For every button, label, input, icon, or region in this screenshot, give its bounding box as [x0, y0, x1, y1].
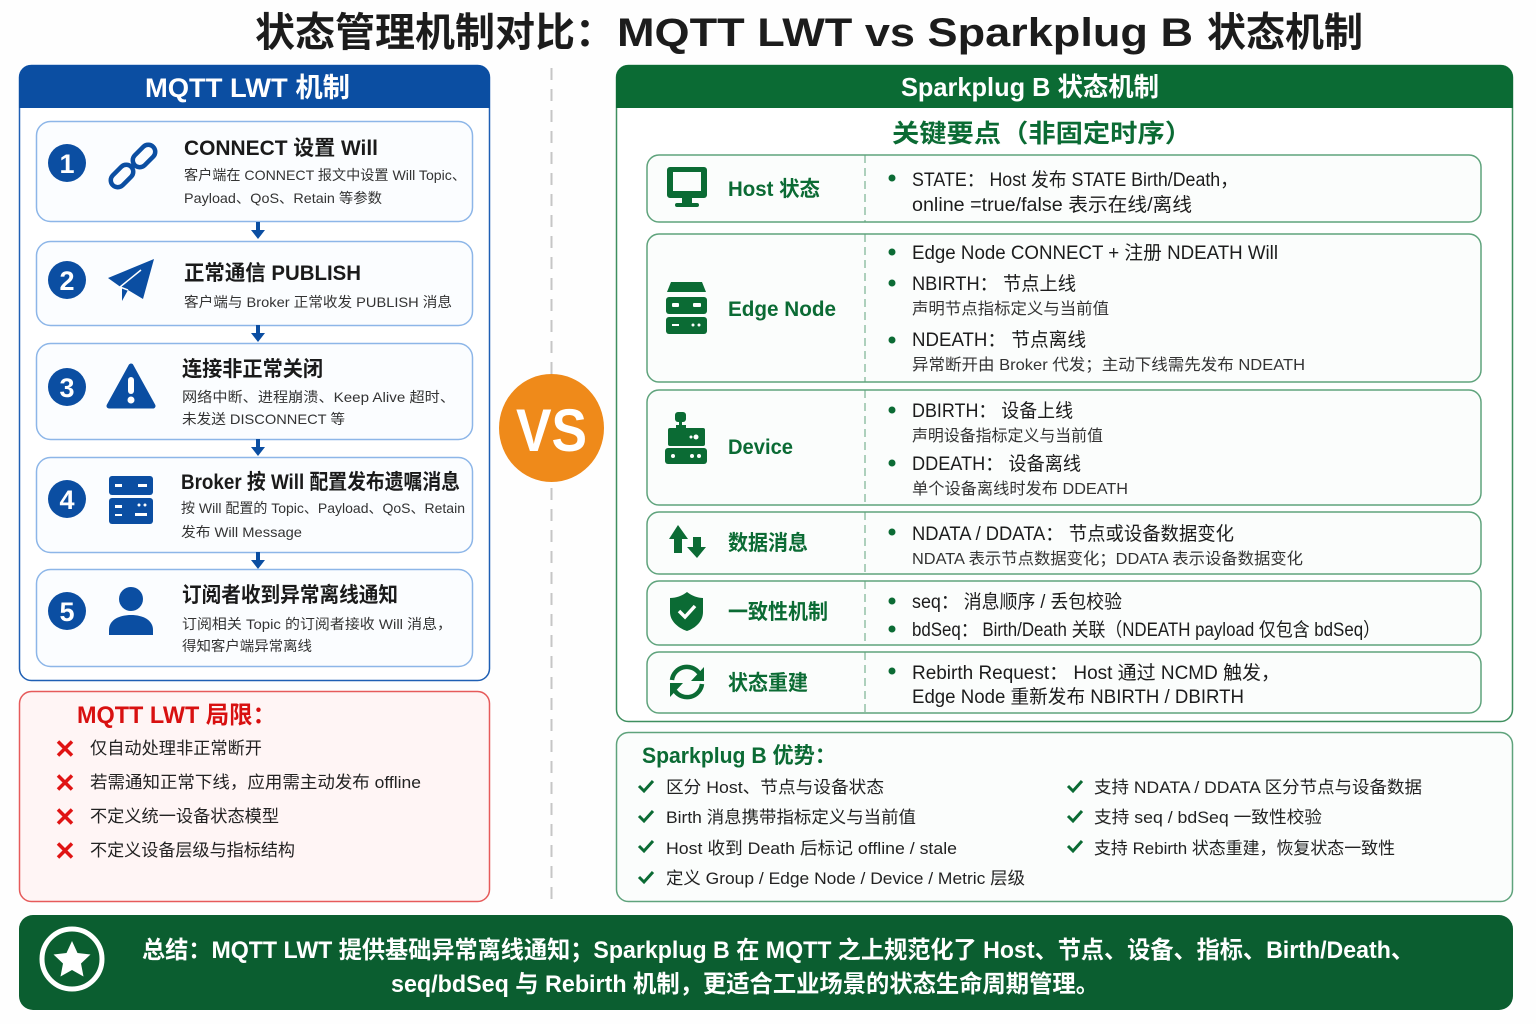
step 5 card: 5	[59, 597, 75, 627]
panel: Sparkplug B advantages: 支持 NDATA / DDATA 区分节点与设备数据	[1094, 778, 1422, 797]
row: Host: STATE： Host 发布 STATE Birth/Death，	[912, 169, 1238, 191]
row: Edge Node	[647, 234, 1481, 382]
step 3 card: 连接非正常关闭	[182, 358, 323, 381]
icon: shield	[670, 592, 703, 631]
row: Device: 声明设备指标定义与当前值	[912, 427, 1103, 445]
summary banner: seq/bdSeq 与 Rebirth 机制，更适合工业场景的状态生命周期管理。	[391, 970, 1099, 998]
VS badge	[499, 374, 604, 482]
row: state rebuild: Rebirth Request： Host 通过 NCMD 触发，	[912, 662, 1280, 684]
row: Edge Node: 异常断开由 Broker 代发；主动下线需先发布 NDEATH	[912, 356, 1305, 374]
step 2 card: 2	[59, 266, 75, 296]
row: data messages: NDATA 表示节点数据变化；DDATA 表示设备数据变化	[912, 550, 1303, 568]
panel: Sparkplug B advantages	[616, 732, 1512, 902]
row: Host	[647, 155, 1481, 222]
arrow 4 to 5	[251, 552, 265, 569]
panel: MQTT LWT mechanism	[19, 65, 490, 680]
arrow 2 to 3	[251, 325, 265, 342]
summary banner: 总结：MQTT LWT 提供基础异常离线通知；Sparkplug B 在 MQTT 之上规范化了 Host、节点、设备、指标、Birth/Death、	[142, 936, 1414, 964]
row: Edge Node: Edge Node	[728, 298, 836, 321]
step 4 card: Broker 按 Will 配置发布遗嘱消息	[181, 470, 460, 494]
row: Edge Node: NDEATH： 节点离线	[912, 329, 1086, 351]
panel: MQTT LWT limitations: 若需通知正常下线，应用需主动发布 offline	[90, 773, 421, 792]
panel: Sparkplug B advantages: Host 收到 Death 后标记 offline / stale	[666, 839, 957, 858]
panel header: Sparkplug B: Sparkplug B 状态机制	[901, 72, 1159, 102]
panel: MQTT LWT limitations: MQTT LWT 局限：	[77, 702, 276, 729]
step 4 card: 发布 Will Message	[181, 524, 302, 540]
arrow 3 to 4	[251, 439, 265, 456]
panel: Sparkplug B advantages: 支持 seq / bdSeq 一致性校验	[1094, 808, 1322, 827]
step 1 card: 1	[59, 149, 75, 179]
arrow 1 to 2	[251, 222, 265, 239]
panel: Sparkplug B advantages: Sparkplug B 优势：	[642, 743, 836, 768]
step 3 card: 3	[59, 373, 75, 403]
step 1 card: 客户端在 CONNECT 报文中设置 Will Topic、	[184, 167, 466, 183]
step 5 card: 订阅者收到异常离线通知	[182, 583, 398, 607]
step 2 card	[36, 242, 472, 326]
row: Host: online =true/false 表示在线/离线	[912, 194, 1192, 216]
summary banner	[19, 915, 1513, 1010]
panel: MQTT LWT limitations: 仅自动处理非正常断开	[90, 739, 262, 758]
step 1 card	[36, 122, 472, 222]
icon: device	[665, 412, 707, 464]
row: Edge Node: NBIRTH： 节点上线	[912, 273, 1076, 295]
step 3 card: 网络中断、进程崩溃、Keep Alive 超时、	[182, 389, 455, 405]
row: consistency: 一致性机制	[728, 601, 828, 624]
panel: Sparkplug B mechanism	[616, 65, 1513, 722]
icon: chain link	[108, 142, 158, 190]
step 5 card: 订阅相关 Topic 的订阅者接收 Will 消息，	[182, 616, 452, 632]
panel header: MQTT LWT: MQTT LWT 机制	[145, 73, 350, 103]
icon: refresh	[670, 667, 704, 697]
panel: Sparkplug B advantages: Birth 消息携带指标定义与当前值	[666, 808, 916, 827]
icon: edge node	[666, 282, 707, 334]
panel header: Sparkplug B	[616, 65, 1513, 108]
title: 状态管理机制对比：	[255, 11, 615, 55]
row: Device: 单个设备离线时发布 DDEATH	[912, 480, 1128, 498]
panel: MQTT LWT limitations: 不定义设备层级与指标结构	[90, 841, 295, 860]
step 3 card: 未发送 DISCONNECT 等	[182, 411, 345, 427]
row: Edge Node: 声明节点指标定义与当前值	[912, 300, 1109, 318]
title	[255, 11, 1363, 55]
icon: warning triangle	[109, 366, 153, 406]
row: Device: Device	[728, 436, 793, 459]
panel: MQTT LWT limitations: 不定义统一设备状态模型	[90, 807, 279, 826]
step 1 card: Payload、QoS、Retain 等参数	[184, 190, 382, 206]
icon: paper plane	[108, 259, 154, 301]
step 4 card: 按 Will 配置的 Topic、Payload、QoS、Retain	[181, 500, 465, 516]
step 4 card	[36, 458, 472, 552]
icon: person	[109, 587, 153, 635]
row: consistency	[647, 581, 1481, 645]
icon: server	[109, 476, 153, 524]
row: Host: Host 状态	[728, 177, 820, 201]
row: state rebuild: Edge Node 重新发布 NBIRTH / DBIRTH	[912, 686, 1244, 708]
row: data messages	[647, 512, 1481, 574]
row: Device: DDEATH： 设备离线	[912, 453, 1081, 475]
panel: MQTT LWT limitations	[20, 692, 490, 902]
step 2 card: 客户端与 Broker 正常收发 PUBLISH 消息	[184, 294, 452, 310]
step 2 card: 正常通信 PUBLISH	[184, 262, 361, 285]
row: data messages: NDATA / DDATA： 节点或设备数据变化	[912, 523, 1234, 545]
advantage check icons	[639, 781, 1082, 882]
icon: monitor	[667, 167, 707, 207]
step 5 card: 得知客户端异常离线	[182, 638, 312, 654]
row: consistency: bdSeq： Birth/Death 关联（NDEATH payload 仅包含 bdSeq）	[912, 619, 1380, 641]
step 4 card: 4	[59, 485, 75, 515]
row: Device	[647, 390, 1481, 505]
row: Edge Node: Edge Node CONNECT + 注册 NDEATH Will	[912, 242, 1278, 264]
title: 状态机制	[1207, 11, 1363, 55]
row: consistency: seq： 消息顺序 / 丢包校验	[912, 591, 1122, 613]
row: state rebuild	[647, 652, 1481, 713]
panel: Sparkplug B advantages: 区分 Host、节点与设备状态	[666, 778, 884, 797]
step 3 card	[36, 344, 472, 440]
title: MQTT LWT vs Sparkplug B	[617, 11, 1193, 55]
step 5 card	[36, 570, 472, 666]
row: state rebuild: 状态重建	[728, 671, 808, 695]
panel header: MQTT LWT	[19, 65, 490, 108]
icon: up and down arrows	[669, 525, 706, 558]
panel: Sparkplug B advantages: 支持 Rebirth 状态重建，恢复状态一致性	[1094, 839, 1395, 858]
row: Device: DBIRTH： 设备上线	[912, 400, 1073, 422]
icon: star in circle	[42, 929, 102, 989]
row: data messages: 数据消息	[728, 531, 808, 555]
key points heading: 关键要点（非固定时序）	[892, 120, 1192, 148]
limitation icons	[58, 742, 72, 858]
VS badge: VS	[516, 397, 587, 464]
step 1 card: CONNECT 设置 Will	[184, 137, 378, 160]
panel: Sparkplug B advantages: 定义 Group / Edge Node / Device / Metric 层级	[666, 869, 1025, 888]
